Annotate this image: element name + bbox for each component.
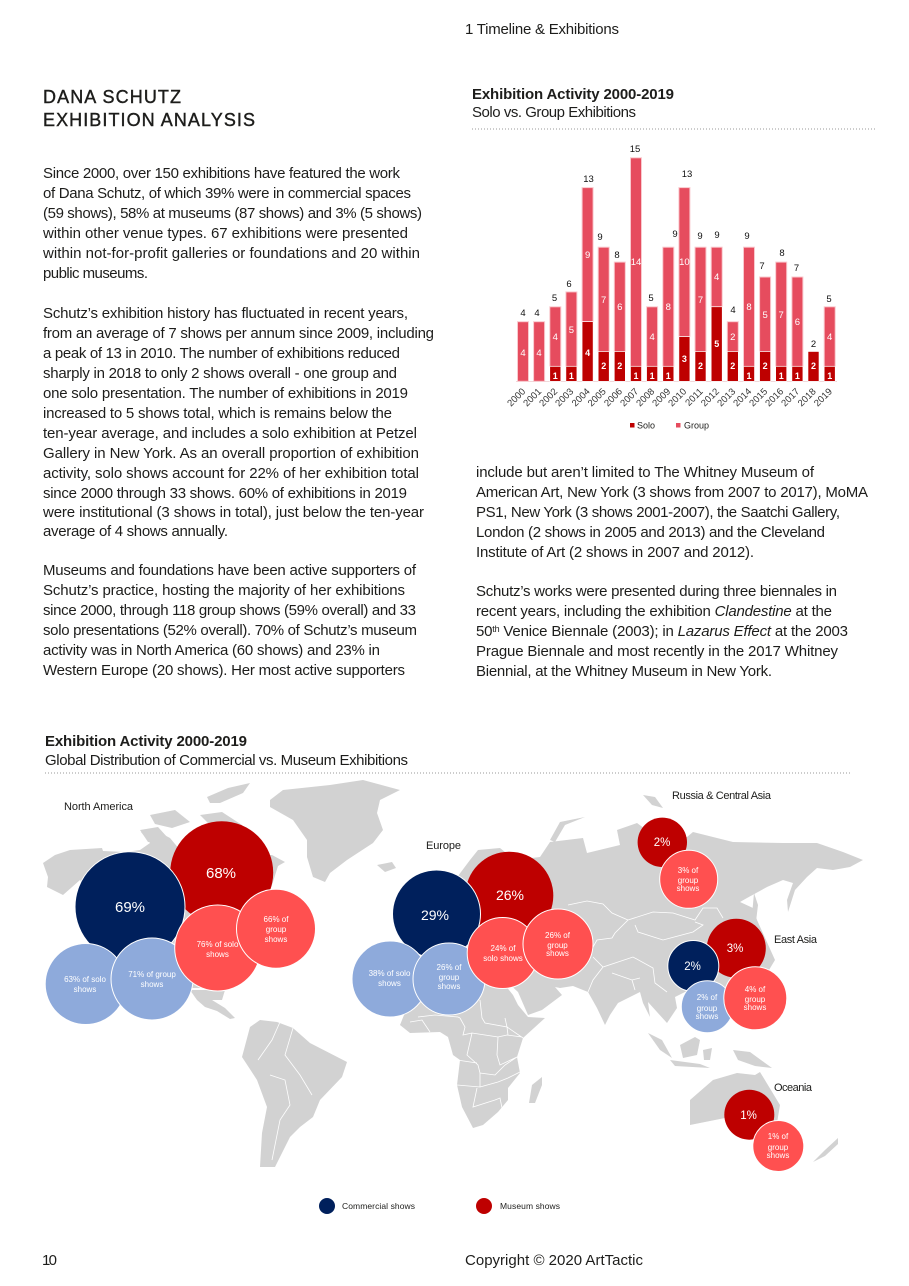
bar chart: solo vs group exhibitions: 7 — [698, 295, 703, 306]
bar chart: solo vs group exhibitions: 2010 — [666, 386, 689, 409]
bubbles: Oceania: group — [768, 1143, 789, 1152]
text block: left column: Schutz’s practice, hosting the majority of her exhibitions — [43, 582, 405, 599]
bubbles: Oceania — [724, 1090, 804, 1172]
text block: right column: th — [492, 624, 500, 634]
text block: left column: from an average of 7 shows per annum since 2009, including — [43, 325, 434, 342]
bar chart: solo vs group exhibitions: 1 — [553, 371, 558, 381]
bar chart: solo vs group exhibitions: 7 — [601, 295, 606, 306]
bubbles: Europe: group — [547, 941, 568, 950]
text block: left column: Museums and foundations have been active supporters of — [43, 562, 417, 579]
bubbles: Oceania: 1% of — [768, 1132, 789, 1141]
bubbles: Europe: group — [439, 973, 460, 982]
map legend — [319, 1198, 560, 1214]
bar chart: solo vs group exhibitions: 5 — [826, 294, 832, 305]
bubbles: East Asia: 2% of — [697, 993, 718, 1002]
bar chart: solo vs group exhibitions: 6 — [617, 302, 622, 313]
bar chart: solo vs group exhibitions: 2000 — [505, 386, 528, 409]
bar chart: solo vs group exhibitions: 1 — [633, 371, 639, 381]
text block: left column: since 2000, through 118 group shows (59% overall) and 33 — [43, 602, 416, 619]
bubbles: East Asia — [668, 919, 787, 1033]
bubbles: Russia & Central Asia: 2% — [654, 837, 670, 849]
bar chart: solo vs group exhibitions: 2012 — [699, 386, 722, 409]
bar chart: solo vs group exhibitions: 4 — [714, 272, 719, 283]
bar chart: solo vs group exhibitions: 4 — [585, 348, 590, 358]
bar chart: solo vs group exhibitions: 2015 — [747, 386, 770, 409]
text block: right column: Schutz’s works were presented during three biennales in — [476, 583, 837, 600]
bar chart: solo vs group exhibitions: 9 — [585, 250, 590, 261]
text block: left column: (59 shows), 58% at museums (87 shows) and 3% (5 shows) — [43, 205, 422, 222]
region labels: East Asia — [774, 934, 818, 946]
bar chart: solo vs group exhibitions: 2009 — [650, 386, 673, 409]
bar chart: solo vs group exhibitions: 8 — [666, 302, 671, 313]
bar chart: solo vs group exhibitions: 4 — [649, 332, 655, 343]
bubbles: North America: 66% of — [264, 915, 289, 924]
map heading: Global Distribution of Commercial vs. Museum Exhibitions — [45, 752, 408, 769]
bar chart: solo vs group exhibitions: 2 — [763, 361, 768, 371]
bubbles: Europe: shows — [546, 949, 569, 958]
bar chart: solo vs group exhibitions: 5 — [648, 293, 654, 304]
bar chart: solo vs group exhibitions: 2007 — [618, 386, 641, 409]
text block: right column: Lazarus Effect at the 2003 — [678, 623, 848, 640]
text block: left column: Since 2000, over 150 exhibitions have featured the work — [43, 165, 400, 182]
bubbles: East Asia: 2% — [684, 961, 701, 973]
text block: right column: American Art, New York (3 shows from 2007 to 2017), MoMA — [476, 484, 868, 501]
bar chart: solo vs group exhibitions: 5 — [569, 325, 574, 336]
bar chart: solo vs group exhibitions: 8 — [614, 250, 620, 261]
title: EXHIBITION ANALYSIS — [43, 110, 255, 130]
bar chart: solo vs group exhibitions: 2013 — [715, 386, 738, 409]
bubbles: East Asia: 3% — [727, 943, 743, 955]
text block: right column: recent years, including the exhibition Clandestine at the — [476, 603, 832, 620]
bar chart: solo vs group exhibitions: 4 — [536, 348, 542, 359]
bar chart: solo vs group exhibitions: 15 — [630, 144, 640, 155]
bubbles: Europe: 38% of solo — [369, 969, 411, 978]
text block: left column: activity, solo shows account for 22% of her exhibition total — [43, 465, 419, 482]
text block: left column: a peak of 13 in 2010. The number of exhibitions reduced — [43, 345, 400, 362]
bar chart: solo vs group exhibitions: 1 — [795, 371, 800, 381]
bubbles: Russia & Central Asia: shows — [677, 884, 699, 893]
bar chart: solo vs group exhibitions: 1 — [746, 371, 752, 381]
text block: left column: solo presentations (52% overall). 70% of Schutz’s museum — [43, 622, 417, 639]
bubbles: North America: shows — [206, 950, 229, 959]
bubbles: Russia & Central Asia: 3% of — [678, 866, 699, 875]
world map — [43, 780, 863, 1167]
map heading: Exhibition Activity 2000-2019 — [45, 733, 247, 750]
bar chart: solo vs group exhibitions: 5 — [714, 339, 719, 349]
bar chart: solo vs group exhibitions: 9 — [672, 229, 678, 240]
bar chart: solo vs group exhibitions: 4 — [730, 305, 736, 316]
bar chart: solo vs group exhibitions: 2 — [601, 361, 606, 371]
bubbles: East Asia: 4% of — [745, 985, 766, 994]
bar chart: solo vs group exhibitions: 8 — [779, 248, 785, 259]
text block: left column: activity was in North America (60 shows) and 23% in — [43, 642, 380, 659]
footer: 10 — [42, 1252, 57, 1269]
bar chart: solo vs group exhibitions: 7 — [759, 261, 765, 272]
bubbles: North America: 69% — [115, 899, 145, 916]
bubbles: Europe: 24% of — [491, 944, 516, 953]
bubbles: North America: 71% of group — [128, 970, 176, 979]
bubbles: North America: group — [266, 925, 287, 934]
bar chart: solo vs group exhibitions: 2001 — [521, 386, 544, 409]
bar chart: solo vs group exhibitions: 2011 — [683, 386, 706, 409]
bar chart: solo vs group exhibitions: 2006 — [602, 386, 625, 409]
bar chart: solo vs group exhibitions: 4 — [520, 308, 526, 319]
bar chart: solo vs group exhibitions: 7 — [794, 263, 799, 274]
text block: right column: Institute of Art (2 shows in 2007 and 2012). — [476, 544, 754, 561]
bubbles: North America: 63% of solo — [64, 975, 106, 984]
title — [43, 87, 255, 130]
footer: Copyright © 2020 ArtTactic — [465, 1252, 644, 1269]
region labels: North America — [64, 801, 134, 813]
text block: left column: increased to 5 shows total, which is remains below the — [43, 405, 392, 422]
text block: left column: average of 4 shows annually. — [43, 523, 228, 540]
bubbles: Europe: 26% of — [545, 931, 571, 940]
bubbles: North America: 68% — [206, 865, 236, 882]
bar chart: solo vs group exhibitions: 2017 — [779, 386, 802, 409]
text block: left column: were institutional (3 shows in total), just below the ten-year — [42, 504, 424, 521]
bar chart: solo vs group exhibitions: 8 — [746, 302, 752, 313]
region labels: Europe — [426, 840, 461, 852]
bar chart: solo vs group exhibitions: 1 — [827, 371, 832, 381]
bubbles: Oceania: shows — [767, 1151, 789, 1160]
text block: right column: PS1, New York (3 shows 2001-2007), the Saatchi Gallery, — [476, 504, 840, 521]
bar chart: solo vs group exhibitions: 10 — [679, 257, 690, 268]
text block: left column: since 2000 through 33 shows. 60% of exhibitions in 2019 — [43, 485, 407, 502]
bar chart: solo vs group exhibitions: Solo — [637, 420, 655, 430]
bar chart: solo vs group exhibitions: 2005 — [586, 386, 609, 409]
bar chart: solo vs group exhibitions: 5 — [762, 310, 768, 321]
text block: left column: Schutz’s exhibition history has fluctuated in recent years, — [43, 305, 408, 322]
bubbles: Russia & Central Asia: group — [678, 876, 699, 885]
bar chart: solo vs group exhibitions: 4 — [520, 348, 526, 359]
bubbles: North America — [45, 821, 315, 1024]
page header: 1 Timeline & Exhibitions — [465, 21, 619, 38]
bubbles: Europe: solo shows — [483, 954, 523, 963]
bar chart: solo vs group exhibitions: 2014 — [731, 386, 754, 409]
bar chart: solo vs group exhibitions: 9 — [744, 231, 750, 242]
bubbles: Europe: shows — [378, 979, 401, 988]
bar chart: solo vs group exhibitions: 2019 — [812, 386, 835, 409]
bar chart: solo vs group exhibitions: 2 — [811, 361, 816, 371]
bubbles: East Asia: shows — [744, 1003, 766, 1012]
bar chart: solo vs group exhibitions: 1 — [569, 371, 574, 381]
bubbles: North America: shows — [265, 935, 287, 944]
bar chart: solo vs group exhibitions: 13 — [682, 169, 692, 180]
text block: right column: 50 — [476, 623, 492, 640]
map heading — [45, 733, 408, 769]
chart heading: Solo vs. Group Exhibitions — [472, 104, 636, 121]
text block: right column: include but aren’t limited to The Whitney Museum of — [476, 464, 815, 481]
bar chart: solo vs group exhibitions: 2004 — [570, 386, 593, 409]
bar chart: solo vs group exhibitions: 2003 — [553, 386, 576, 409]
bar chart: solo vs group exhibitions: 13 — [583, 174, 594, 185]
bubbles: North America: shows — [141, 980, 163, 989]
bar chart: solo vs group exhibitions: 9 — [714, 230, 720, 241]
bubbles: Europe: 26% of — [437, 963, 462, 972]
bubbles: Oceania: 1% — [740, 1110, 757, 1122]
bar chart: solo vs group exhibitions: 2 — [811, 339, 816, 350]
text block: left column: ten-year average, and includes a solo exhibition at Petzel — [43, 425, 417, 442]
text block: left column: Western Europe (20 shows). Her most active supporters — [43, 662, 405, 679]
bar chart: solo vs group exhibitions: 4 — [534, 308, 540, 319]
text block: left column: within other venue types. 67 exhibitions were presented — [42, 225, 408, 242]
title: DANA SCHUTZ — [43, 87, 181, 107]
bubbles: Europe: 29% — [421, 907, 449, 923]
bubbles: Europe: shows — [438, 982, 460, 991]
text block: right column: Venice Biennale (2003); in — [499, 623, 678, 640]
bar chart: solo vs group exhibitions: 2002 — [537, 386, 560, 409]
bubbles: Europe: 26% — [496, 887, 524, 903]
chart heading — [472, 86, 674, 121]
text block: left column: within not-for-profit galleries or foundations and 20 within — [42, 245, 420, 262]
bar chart: solo vs group exhibitions: 1 — [666, 371, 671, 381]
bar chart: solo vs group exhibitions: 14 — [631, 257, 641, 268]
text block: left column — [42, 165, 434, 679]
bar chart: solo vs group exhibitions: Group — [684, 420, 709, 430]
bar chart: solo vs group exhibitions: 9 — [597, 232, 603, 243]
region labels: Russia & Central Asia — [672, 790, 772, 802]
bar chart: solo vs group exhibitions: 3 — [682, 354, 687, 364]
text block: right column: London (2 shows in 2005 and 2013) and the Cleveland — [476, 524, 825, 541]
bar chart: solo vs group exhibitions: 2008 — [634, 386, 657, 409]
bar chart: solo vs group exhibitions: 1 — [779, 371, 784, 381]
bubbles: Europe — [352, 852, 593, 1017]
bar chart: solo vs group exhibitions: 6 — [566, 279, 572, 290]
text block: left column: Gallery in New York. As an overall proportion of exhibition — [43, 445, 419, 462]
region labels — [64, 790, 818, 1094]
bar chart: solo vs group exhibitions: 7 — [779, 310, 784, 321]
text block: left column: one solo presentation. The number of exhibitions in 2019 — [43, 385, 408, 402]
bar chart: solo vs group exhibitions: 2 — [617, 361, 622, 371]
text block: right column — [476, 464, 868, 680]
bubbles: East Asia: group — [697, 1004, 718, 1013]
map legend: Museum shows — [500, 1201, 560, 1211]
bubbles: North America: shows — [74, 985, 96, 994]
text block: right column: Biennial, at the Whitney Museum in New York. — [476, 663, 772, 680]
bar chart: solo vs group exhibitions: 9 — [697, 231, 703, 242]
bar chart: solo vs group exhibitions: 2016 — [763, 386, 786, 409]
bar chart: solo vs group exhibitions: 2 — [698, 361, 703, 371]
bar chart: solo vs group exhibitions: 4 — [553, 332, 558, 343]
bar chart: solo vs group exhibitions — [505, 144, 837, 430]
bar chart: solo vs group exhibitions: 6 — [795, 317, 800, 328]
map: country borders — [258, 901, 723, 1160]
bubbles: East Asia: group — [745, 995, 766, 1004]
bar chart: solo vs group exhibitions: 2 — [730, 361, 735, 371]
footer — [42, 1252, 644, 1269]
bar chart: solo vs group exhibitions: 2 — [730, 332, 735, 343]
bubbles: Russia & Central Asia — [638, 818, 718, 908]
bar chart: solo vs group exhibitions: 4 — [827, 332, 832, 343]
region labels: Oceania — [774, 1082, 813, 1094]
text block: left column: of Dana Schutz, of which 39% were in commercial spaces — [43, 185, 411, 202]
text block: left column: public museums. — [43, 265, 148, 282]
bar chart: solo vs group exhibitions: 2018 — [796, 386, 819, 409]
map legend: Commercial shows — [342, 1201, 415, 1211]
bar chart: solo vs group exhibitions: 5 — [552, 293, 557, 304]
text block: left column: sharply in 2018 to only 2 shows overall - one group and — [43, 365, 397, 382]
bubbles: East Asia: shows — [696, 1012, 718, 1021]
chart heading: Exhibition Activity 2000-2019 — [472, 86, 674, 103]
text block: right column: Prague Biennale and most recently in the 2017 Whitney — [476, 643, 838, 660]
bubbles: North America: 76% of solo — [197, 940, 239, 949]
bar chart: solo vs group exhibitions: 1 — [650, 371, 655, 381]
